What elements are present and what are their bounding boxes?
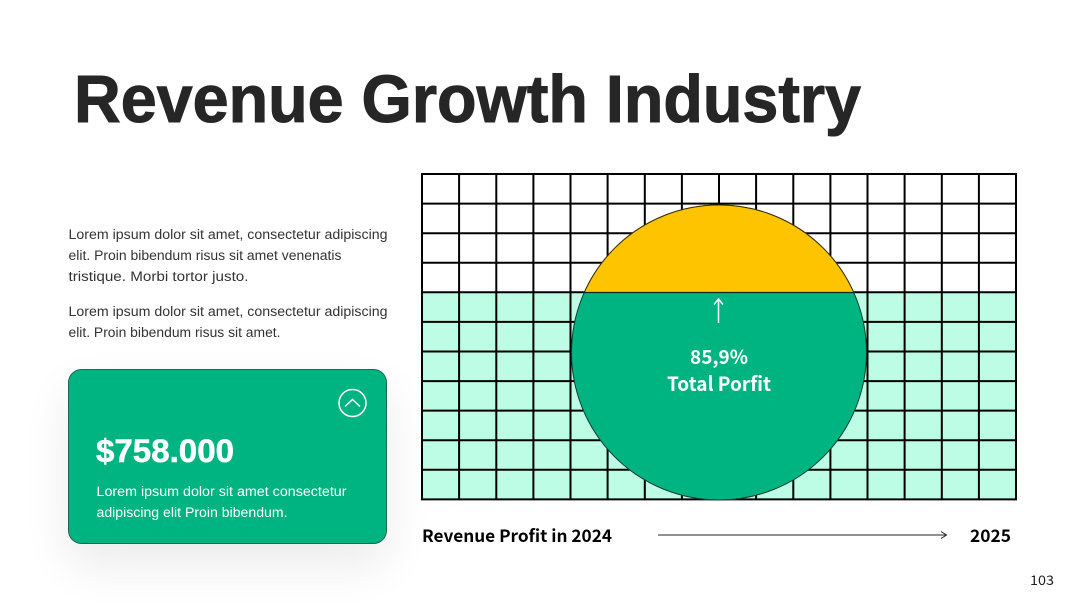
text block: intro paragraphs: Lorem ipsum dolor sit amet, consectetur adipiscing [68, 227, 388, 242]
title: Revenue Growth Industry [74, 62, 861, 137]
card value: $758.000 [96, 433, 234, 469]
chart label: total profit: Total Porfit [667, 368, 771, 397]
chart label: percentage: 85,9% [690, 341, 748, 370]
card description: Lorem ipsum dolor sit amet consectetur [96, 484, 347, 499]
text block: intro paragraphs: elit. Proin bibendum risus sit amet venenatis [68, 248, 342, 263]
page number: 103 [1030, 569, 1054, 589]
card description [96, 484, 347, 520]
circle: green share [572, 205, 866, 500]
text block: intro paragraphs: Lorem ipsum dolor sit amet, consectetur adipiscing [68, 304, 388, 319]
chart: waffle grid with circle [421, 174, 1017, 500]
icon: chevron up in circle [339, 390, 366, 416]
axis label: start: Revenue Profit in 2024 [422, 522, 612, 547]
arrow: timeline [658, 532, 946, 538]
card description: adipiscing elit Proin bibendum. [96, 505, 288, 520]
panel: revenue card [68, 370, 387, 565]
circle: yellow share [584, 204, 854, 292]
axis label: end: 2025 [970, 522, 1011, 547]
text block: intro paragraphs [68, 227, 388, 340]
text block: intro paragraphs: elit. Proin bibendum risus sit amet. [68, 325, 280, 340]
text block: intro paragraphs: tristique. Morbi tortor justo. [68, 269, 248, 284]
icon: up arrow [714, 299, 723, 323]
